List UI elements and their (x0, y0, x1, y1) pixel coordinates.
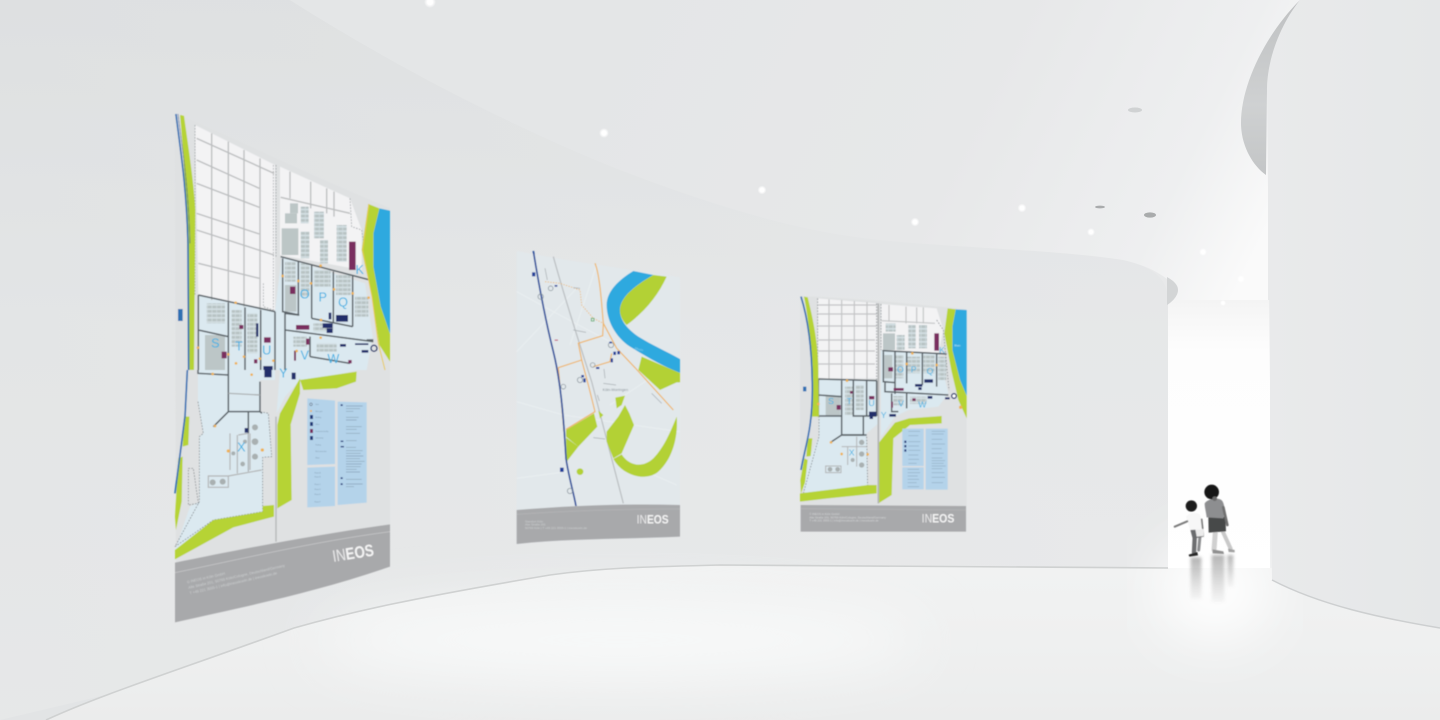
large grey halls (826, 333, 895, 416)
dashed boundaries (803, 298, 949, 493)
grid lines (197, 133, 350, 310)
zone letters: X (237, 440, 246, 454)
roundabout icon (952, 394, 956, 398)
green areas (175, 372, 357, 559)
dashed boundaries (195, 125, 370, 310)
legend panel two (902, 467, 924, 489)
zone letters: Y (279, 366, 288, 380)
tank circles (828, 440, 864, 472)
grey road (553, 257, 623, 503)
zone letters: V (898, 399, 904, 409)
dark buildings (245, 370, 296, 433)
central green (878, 416, 942, 503)
poster 1: large site map, left (175, 113, 390, 622)
children (1175, 485, 1235, 602)
zone letters: V (300, 348, 309, 362)
poster 3: site map, right (800, 296, 967, 532)
legend panel one: Parking (315, 444, 321, 446)
curved wall lip (1167, 277, 1178, 305)
skirting line (46, 565, 1168, 720)
block outlines (198, 370, 262, 433)
zone letters: K (939, 345, 945, 355)
footer address: T +49 221 3555-1 | info@ineoskoeln.de | ineoskoeln.de (809, 519, 879, 523)
large grey halls (205, 285, 296, 370)
poster 2 sheet (517, 251, 680, 544)
footer address: © INEOS in Köln GmbH (809, 512, 839, 516)
poster 1 sheet (175, 113, 390, 622)
small child (1175, 500, 1204, 557)
site buildings grey (207, 262, 368, 353)
INEOS logo: INEOS (637, 513, 669, 527)
legend panel one (307, 398, 335, 465)
river label: Rhein (954, 346, 961, 348)
legend panel two: Route D (315, 488, 322, 491)
legend panel one: Rail connection (315, 450, 327, 453)
river bank green (362, 204, 390, 362)
legend panel one: Water (315, 457, 320, 460)
left green strip (804, 297, 819, 417)
legend panel one: Office (315, 424, 320, 426)
zone letters: T (235, 340, 243, 354)
small sign (803, 387, 806, 391)
place label: Köln-Worringen (603, 388, 628, 392)
river (373, 208, 390, 334)
footer rule (801, 509, 966, 510)
legend panel two (307, 467, 335, 507)
floor (46, 565, 1440, 720)
footer address: © INEOS in Köln GmbH (187, 572, 226, 584)
railway (175, 370, 187, 493)
tanks and pipes (208, 433, 262, 487)
legend panel two: Route F (315, 501, 321, 504)
grey buildings upper right (282, 203, 298, 255)
orange routes (545, 263, 673, 432)
legend panel one: Main gate (315, 410, 323, 413)
footer address: Alte Straße 201 (525, 523, 546, 527)
block inner grey lines (228, 393, 260, 472)
zone letters: W (327, 352, 339, 366)
footer address: Standort Köln (525, 519, 543, 523)
pale blue site areas (802, 378, 878, 493)
legend panel one (902, 429, 924, 466)
footer address: T +49 221 3555-1 | info@ineoskoeln.de | ineoskoeln.de (189, 571, 277, 595)
floor light reflection (320, 604, 920, 676)
footer rule (517, 509, 680, 514)
yellow road (363, 204, 385, 370)
zone letters: T (847, 396, 853, 406)
zone letters: O (300, 287, 310, 301)
dark location markers (532, 272, 620, 472)
zone letters (211, 263, 364, 366)
dashed boundary (175, 402, 272, 547)
dark highlighted buildings (256, 313, 368, 370)
white grid areas (818, 298, 878, 378)
zone letters: S (211, 337, 220, 351)
older child (1204, 485, 1235, 554)
orange markers (211, 373, 264, 453)
footer band (175, 524, 390, 622)
lower left green (800, 438, 877, 502)
motorway junction loops (538, 286, 614, 494)
tank pipework (826, 437, 867, 473)
poster 1 lower map (175, 366, 390, 622)
zone letters: W (918, 399, 927, 409)
centre road (274, 417, 278, 542)
poster 2: regional route map, centre (517, 251, 680, 544)
poster 3 sheet (800, 296, 967, 532)
orange markers (817, 352, 962, 456)
centre road (876, 303, 881, 503)
railway (801, 297, 812, 470)
river (952, 309, 967, 396)
skirting right wall (1272, 580, 1440, 628)
zone letters: S (828, 396, 834, 406)
zone letters: Q (338, 296, 348, 310)
white grid area (195, 125, 275, 310)
ceiling (290, 0, 1300, 320)
legend panel two: Route E (315, 493, 322, 496)
zone letters: U (869, 398, 875, 408)
grey buildings (845, 323, 946, 415)
central plant area (277, 370, 357, 413)
road labels (545, 268, 662, 439)
ceiling lights (424, 0, 1245, 306)
zone letters: U (262, 344, 271, 358)
footer address: Alte Straße 201, 50769 Köln/Cologne, Deutschland/Germany (809, 515, 886, 519)
legend panel three (926, 429, 948, 490)
zone letters (237, 366, 288, 454)
legend panel one: Gate (315, 403, 319, 406)
legend panel two: Route C (315, 483, 322, 486)
green marker (591, 318, 594, 321)
dark outlines (818, 351, 948, 442)
legend panel two: Route A (315, 471, 321, 474)
small sign (178, 309, 183, 321)
right foreground wall (1267, 0, 1440, 628)
zone letters: O (897, 365, 904, 375)
footer band (517, 504, 680, 544)
footer rule (175, 532, 390, 573)
footer address (187, 558, 287, 595)
dark buildings (869, 379, 950, 419)
grid lines (818, 299, 935, 379)
poster 1 upper map (176, 114, 390, 370)
river (607, 271, 680, 373)
railway and green strip (180, 115, 195, 370)
footer address: Alte Straße 201, 50769 Köln/Cologne, Deutschland/Germany (188, 564, 285, 590)
legend panel three (338, 402, 367, 505)
orange gate markers (197, 264, 370, 365)
west plant area pale blue (175, 370, 275, 550)
zone letters: Y (881, 410, 887, 420)
pale blue site areas (198, 257, 373, 370)
zone letters: X (849, 448, 855, 458)
zone letters (828, 345, 945, 458)
green fields (566, 275, 680, 477)
zone letters: Q (927, 366, 934, 376)
INEOS logo: INEOS (922, 512, 954, 526)
footer address (809, 512, 886, 523)
river label: Rhein (634, 346, 644, 352)
zone letters: P (911, 365, 917, 375)
red marker (555, 340, 558, 341)
legend panel one: Building (315, 417, 321, 419)
legend panel one: Production facility (315, 430, 328, 433)
legend panel one: Laboratory (315, 437, 323, 440)
green bank (944, 308, 967, 418)
roundabout icon (371, 345, 377, 351)
bright opening to next room (1168, 300, 1270, 580)
footer address (525, 519, 587, 530)
wall edge overhang (1241, 0, 1300, 175)
zone letters: P (318, 291, 327, 305)
footer address: 50769 Köln | T +49 221 3555-1 | ineoskoeln.de (525, 526, 587, 530)
blue motorway (533, 251, 576, 506)
zone letters: K (355, 263, 364, 277)
light road network (517, 265, 680, 485)
INEOS logo: INEOS (331, 541, 375, 566)
legend panel two: Route B (315, 476, 322, 479)
bright floor by opening (1160, 542, 1270, 638)
footer band (801, 505, 966, 532)
reflections (1191, 555, 1233, 602)
dark block outlines (198, 257, 373, 370)
